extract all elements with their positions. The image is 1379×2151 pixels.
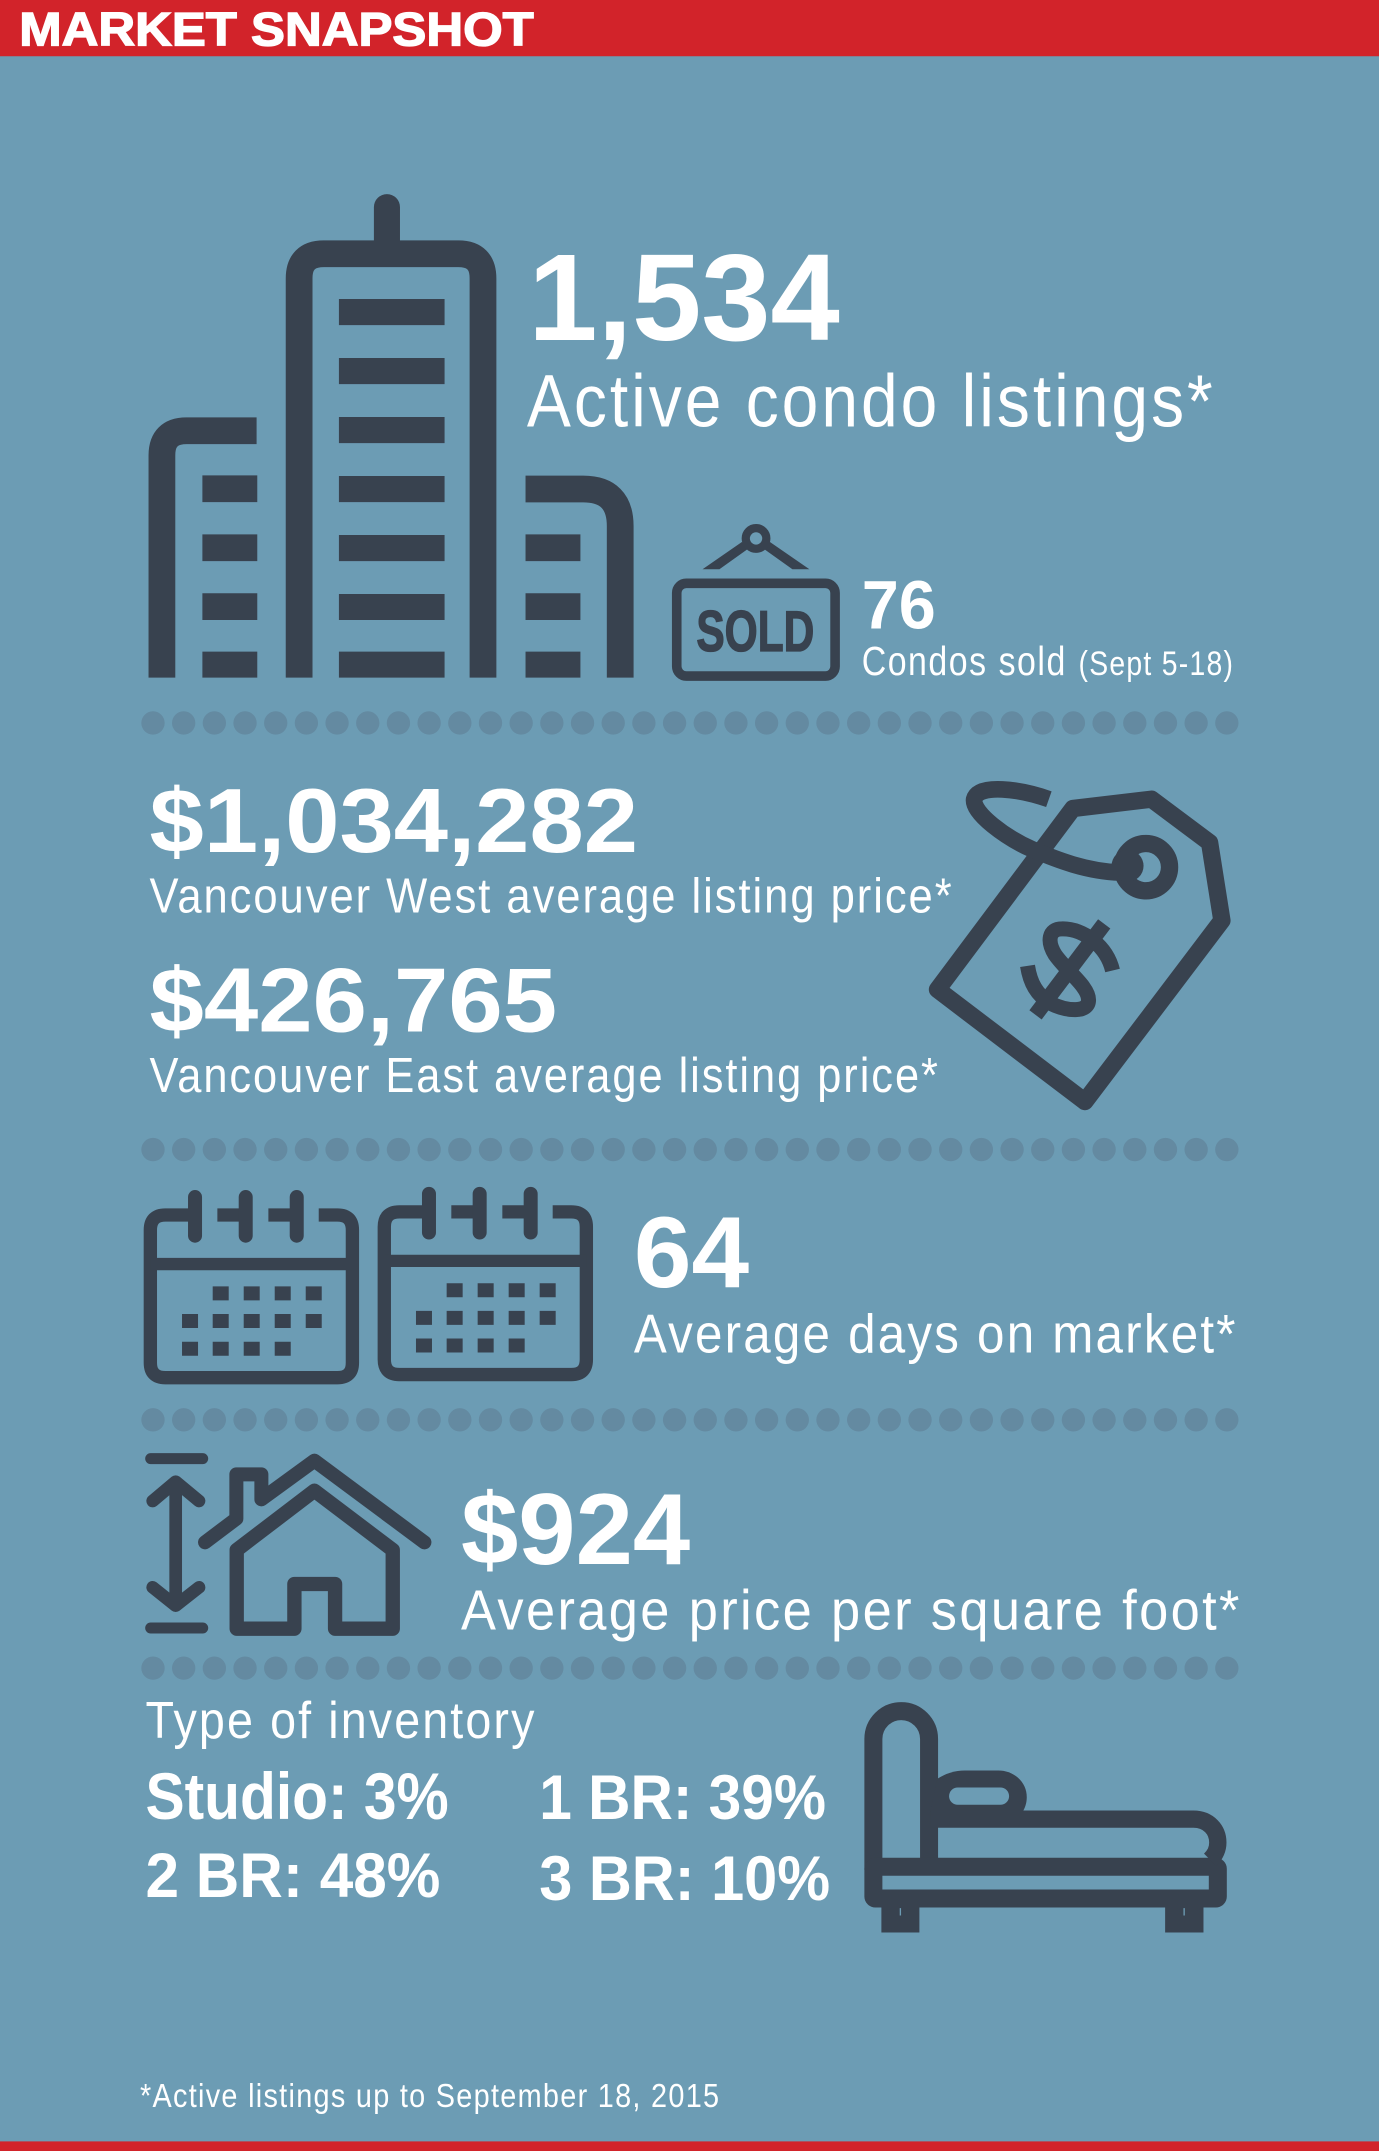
stat: active condo listings: 1,534	[528, 229, 840, 367]
header bar with title	[0, 0, 1379, 56]
stat: average days on market	[634, 1195, 1238, 1365]
icon: sold sign	[677, 528, 835, 676]
stat: average price per square foot: $924	[461, 1472, 690, 1586]
icon: second calendar	[384, 1194, 586, 1375]
stat: Vancouver West average listing price: Vancouver West average listing price*	[150, 868, 954, 923]
inventory breakdown: 1 BR: 39%	[539, 1763, 826, 1833]
icon: price tag	[937, 789, 1222, 1102]
icon: bed	[873, 1711, 1218, 1932]
icon: house	[205, 1461, 424, 1629]
icon: sold sign: SOLD	[696, 600, 814, 664]
stat: Vancouver East average listing price: Vancouver East average listing price*	[150, 1048, 940, 1103]
stat: Vancouver West average listing price	[150, 771, 954, 923]
stat: condos sold	[862, 566, 1234, 684]
stat: Vancouver East average listing price	[150, 951, 940, 1103]
header bar with title: MARKET SNAPSHOT	[19, 3, 534, 56]
stat: active condo listings: Active condo listings*	[527, 360, 1216, 443]
icon: height arrow	[151, 1459, 203, 1628]
inventory breakdown: Studio: 3%	[145, 1759, 449, 1833]
stat: average price per square foot	[461, 1472, 1242, 1642]
heading: type of inventory: Type of inventory	[145, 1692, 537, 1750]
stat: Vancouver East average listing price: $426,765	[150, 951, 557, 1052]
footnote: *Active listings up to September 18, 2015	[140, 2077, 720, 2114]
stat: active condo listings	[527, 229, 1216, 443]
stat: Vancouver West average listing price: $1,034,282	[150, 771, 638, 872]
inventory breakdown	[145, 1759, 830, 1914]
inventory breakdown: 3 BR: 10%	[539, 1844, 830, 1914]
stat: condos sold: (Sept 5-18)	[1079, 645, 1234, 683]
icon: first calendar	[150, 1197, 352, 1378]
stat: average price per square foot: Average price per square foot*	[461, 1579, 1242, 1642]
stat: condos sold: Condos sold	[862, 638, 1067, 684]
stat: average days on market: 64	[634, 1195, 749, 1309]
stat: condos sold: 76	[862, 566, 936, 643]
stat: average days on market: Average days on market*	[634, 1303, 1238, 1365]
icon: condo buildings	[162, 194, 620, 678]
bottom red bar	[0, 2141, 1379, 2151]
inventory breakdown: 2 BR: 48%	[145, 1841, 440, 1911]
